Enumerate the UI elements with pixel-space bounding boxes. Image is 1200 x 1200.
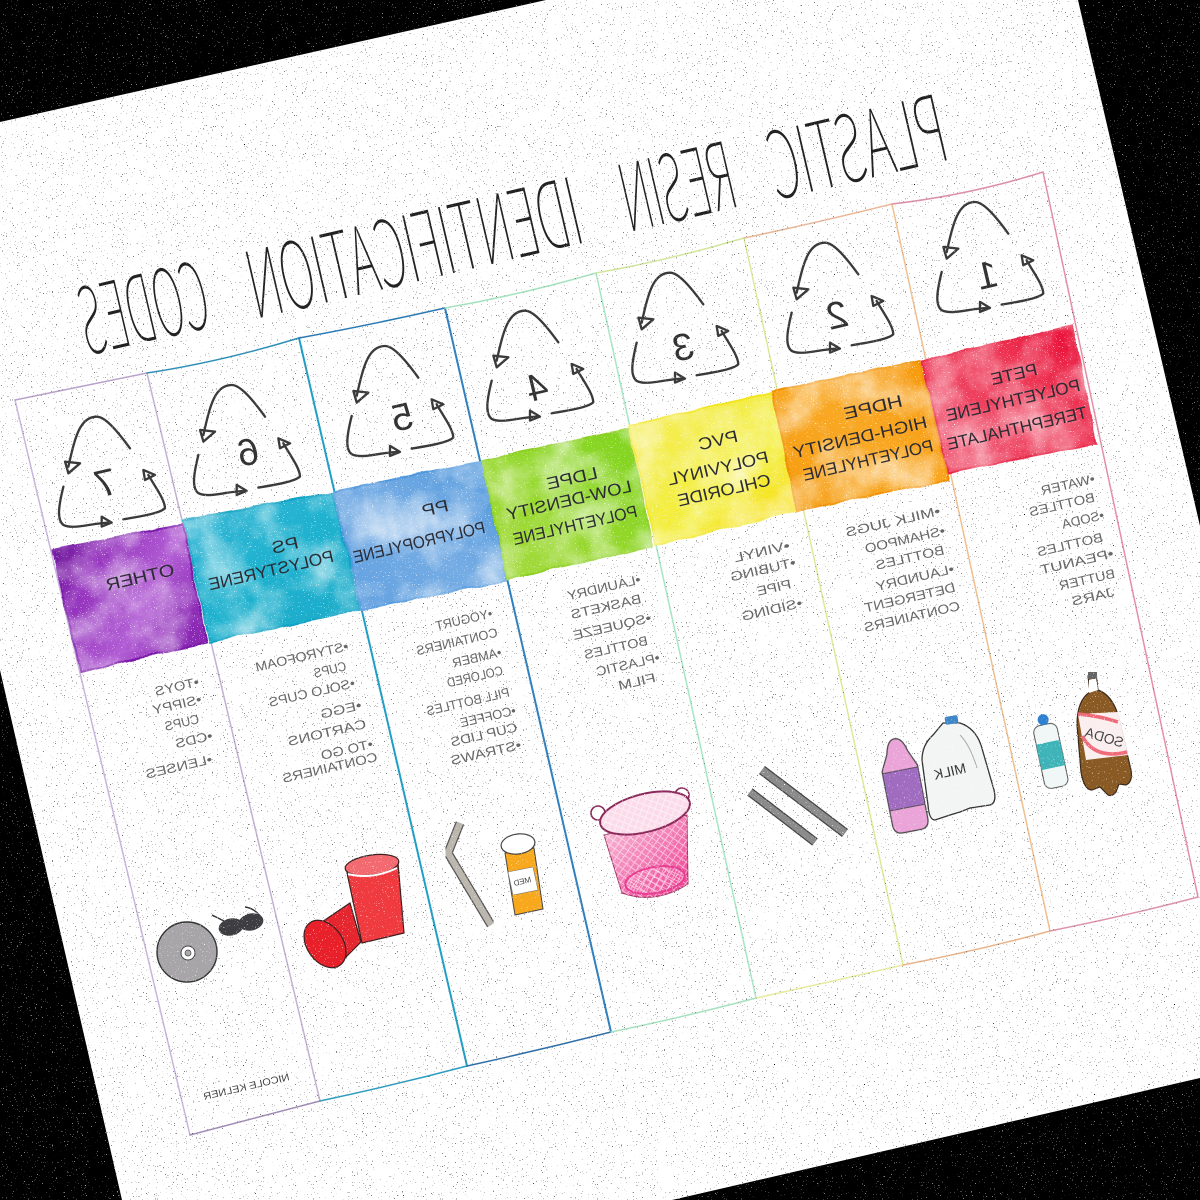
list: ldpe: •LAUNDRY (565, 572, 642, 603)
band label: pete: TEREPHTHALATE (945, 403, 1089, 454)
list: other (144, 674, 214, 782)
list: hdpe (844, 503, 961, 635)
list: polypropylene: •YOGURT (434, 606, 494, 633)
recycling icon 1 (937, 202, 1043, 312)
illustration: pill bottle: MED (513, 875, 532, 888)
list: hdpe: •LAUNDRY (874, 561, 956, 594)
list: other: CUPS (163, 711, 201, 734)
band label: ps: POLYSTYRENE (207, 547, 336, 594)
illustration: soda bottle (1077, 672, 1131, 796)
resin code digits: 2 (822, 293, 852, 339)
illustration: milk jug (922, 715, 995, 820)
list: other: •CDS (173, 728, 214, 751)
colour band: other (53, 524, 207, 672)
list: polypropylene (414, 606, 523, 768)
list: ldpe: BOTTLES (582, 633, 649, 662)
list: pete: BUTTER (1057, 566, 1116, 593)
recycling icon 2 (787, 243, 893, 353)
resin code digits: 4 (522, 365, 552, 411)
band label: ps: PS (270, 533, 300, 558)
list: ldpe: FILM (617, 670, 657, 693)
band label: pp: POLYPROPYLENE (351, 518, 487, 567)
list: pete: •SODA (1060, 507, 1106, 532)
title: RESIN (605, 101, 747, 258)
list: polystyrene: •EGG (319, 697, 363, 722)
title: PLASTIC (752, 54, 958, 226)
colour band: hdpe (772, 360, 948, 511)
list: pvc: •TUBING (729, 555, 797, 584)
illustration: pipes (750, 770, 845, 842)
recycling icon 7 (59, 417, 165, 527)
illustration: cd (157, 922, 217, 982)
illustration: milk jug: MILK (932, 760, 968, 783)
illustration: red cups (295, 851, 404, 976)
colour band: pvc (629, 393, 797, 545)
column grid lines (15, 172, 1198, 1135)
resin code digits (90, 253, 1002, 507)
list: polypropylene: CUP LIDS (449, 720, 519, 750)
signature: NICOLE KELNER (202, 1072, 291, 1103)
list: pete: BOTTLES (1035, 530, 1104, 559)
band label: pvc: CHLORIDE (676, 470, 773, 510)
list: polypropylene: COLORED (445, 663, 504, 690)
list: hdpe: •SHAMPOO (863, 523, 947, 556)
recycling icon 4 (487, 311, 593, 421)
illustration: pill bottle (500, 832, 543, 915)
band label: hdpe: HIGH-DENSITY (791, 413, 929, 462)
band label: pp (351, 496, 487, 567)
list: polypropylene: •AMBER (451, 645, 503, 670)
resin code digits: 7 (90, 461, 120, 507)
list: ldpe: •PLASTIC (595, 650, 661, 679)
band label: pete (944, 360, 1089, 454)
band label: pvc: PVC (696, 427, 740, 454)
list: polypropylene: •STRAWS (449, 737, 523, 768)
resin code digits: 1 (972, 253, 1002, 299)
list: hdpe: •MILK JUGS (844, 503, 942, 540)
list: pete: •WATER (1039, 471, 1096, 498)
list: polystyrene: CONTAINERS (281, 749, 379, 786)
list: hdpe: CONTAINERS (862, 598, 961, 635)
list: pvc: PIPE (755, 576, 793, 599)
list: ldpe (565, 572, 661, 693)
list: other: •TOYS (153, 674, 200, 699)
list: polystyrene: CUPS (312, 658, 348, 681)
illustration: straw (448, 823, 491, 925)
list: pete: JARS (1070, 584, 1116, 609)
illustration: sunglasses (212, 907, 265, 938)
band label: ldpe (505, 463, 639, 549)
list: polystyrene: •SOLO CUPS (267, 675, 356, 710)
title (64, 54, 958, 381)
list: polypropylene: PILL BOTTLES (424, 685, 511, 718)
resin code digits: 5 (387, 395, 417, 441)
band label: pvc (666, 427, 773, 510)
colour band: pete (922, 326, 1096, 473)
list: pvc: •SIDING (740, 595, 804, 624)
list: polystyrene: •STYROFOAM (254, 638, 350, 675)
band label: pete: PETE (989, 360, 1039, 389)
resin code digits: 3 (668, 325, 698, 371)
illustration: shampoo bottle (876, 735, 930, 835)
recycling icon 5 (347, 346, 453, 456)
list: ldpe: •SQUEEZE (571, 610, 653, 643)
list: other: •LENSES (144, 752, 214, 782)
list: hdpe: DETERGENT (863, 580, 957, 615)
list: pete: BOTTLES (1027, 490, 1096, 519)
list: pete (1027, 471, 1116, 609)
list: polypropylene: •COFFEE (458, 703, 517, 730)
band label: ldpe: POLYETHYLENE (511, 502, 639, 549)
recycling icon 3 (632, 273, 738, 383)
list: other: •SIPPY (150, 692, 203, 718)
list: polystyrene (254, 638, 379, 786)
list: hdpe: BOTTLES (874, 542, 946, 573)
band label: ldpe: LOW-DENSITY (505, 477, 634, 524)
colour band: pp (333, 462, 507, 610)
resin code digits: 6 (233, 430, 263, 476)
list: pvc: •VINYL (732, 538, 791, 565)
band label: hdpe: POLYETHYLENE (801, 436, 935, 485)
list: pete: •PEANUT (1039, 546, 1115, 577)
illustration: laundry basket (591, 783, 694, 898)
list: polystyrene: •TO GO (319, 736, 374, 763)
colour band: ldpe (482, 429, 652, 579)
recycling icon 6 (194, 385, 300, 495)
illustration: water bottle (1030, 712, 1069, 790)
band label: hdpe (791, 391, 935, 485)
band label: other: OTHER (104, 560, 176, 595)
list: pvc (729, 538, 804, 624)
band label: pete: POLYETHYLENE (944, 376, 1082, 425)
band label: hdpe: HDPE (842, 391, 904, 424)
list: polystyrene: CARTONS (286, 716, 368, 749)
band label: pp: PP (420, 496, 450, 521)
list: polypropylene: CONTAINERS (414, 625, 499, 658)
band label: pvc: POLYVINYL (666, 448, 770, 489)
colour band: ps (183, 493, 360, 642)
list: ldpe: BASKETS (569, 591, 643, 622)
illustration: soda bottle: SODA (1082, 724, 1126, 750)
band label: ldpe: LDPE (545, 463, 600, 494)
